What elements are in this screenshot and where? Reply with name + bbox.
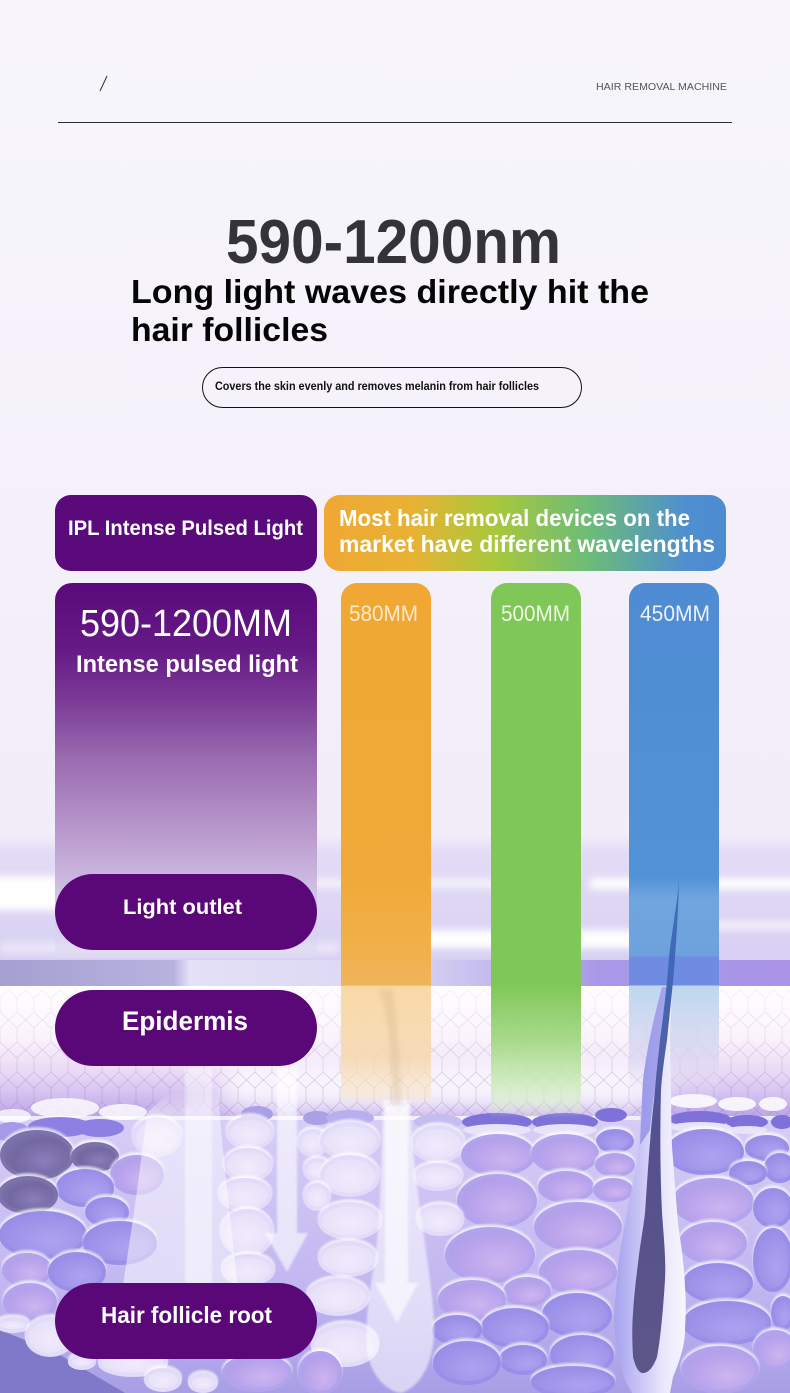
headline: hair follicles — [131, 311, 328, 348]
cell net texture — [0, 990, 790, 1115]
header slash mark — [100, 76, 107, 91]
blue bar label: 450MM — [640, 601, 710, 626]
light outlet label: Light outlet — [123, 895, 242, 919]
right hair follicle — [615, 880, 686, 1393]
panel wavelength: 590-1200MM — [80, 603, 292, 645]
header label: HAIR REMOVAL MACHINE — [596, 82, 727, 93]
arrow: center — [375, 1105, 418, 1323]
arrow: middle — [265, 1068, 308, 1272]
IPL heading box — [55, 495, 317, 571]
white centre glow on epidermis — [220, 1062, 660, 1110]
panel subtitle: Intense pulsed light — [76, 651, 298, 678]
skin cross-section illustration — [0, 835, 790, 1393]
blue 450MM bar — [629, 583, 719, 1100]
dark lower left corner — [0, 1330, 125, 1393]
epidermis pill — [55, 990, 317, 1066]
surface waves — [0, 835, 790, 986]
cells — [0, 1118, 790, 1393]
rainbow heading text: Most hair removal devices on the — [339, 505, 690, 531]
hair follicle root label: Hair follicle root — [101, 1302, 272, 1328]
left pale follicle — [122, 1092, 238, 1290]
green bar label: 500MM — [501, 601, 570, 626]
green 500MM bar — [491, 583, 581, 1118]
deep tissue base — [0, 1120, 790, 1393]
hair follicle root pill — [55, 1283, 317, 1359]
epidermis layer — [0, 986, 790, 1116]
headline: Long light waves directly hit the — [131, 273, 649, 310]
rainbow heading box — [324, 495, 726, 571]
orange bar label: 580MM — [349, 601, 418, 626]
title: 590-1200nm — [226, 208, 561, 277]
headline — [131, 273, 649, 348]
upper sheath band — [640, 987, 668, 1145]
rainbow heading text — [339, 505, 715, 557]
epidermis label: Epidermis — [122, 1006, 248, 1036]
IPL heading text: IPL Intense Pulsed Light — [68, 517, 303, 540]
top ridge of cells — [0, 1094, 790, 1142]
rainbow heading text: market have different wavelengths — [339, 531, 715, 557]
center follicle — [366, 988, 434, 1393]
intense pulsed light panel — [55, 583, 317, 958]
subtitle text: Covers the skin evenly and removes melanin from hair follicles — [215, 381, 539, 393]
arrow: left shaft — [185, 1068, 212, 1283]
orange 580MM bar — [341, 583, 431, 1105]
hair strand — [632, 880, 679, 1373]
light outlet pill — [55, 874, 317, 950]
subtitle pill — [202, 368, 582, 408]
